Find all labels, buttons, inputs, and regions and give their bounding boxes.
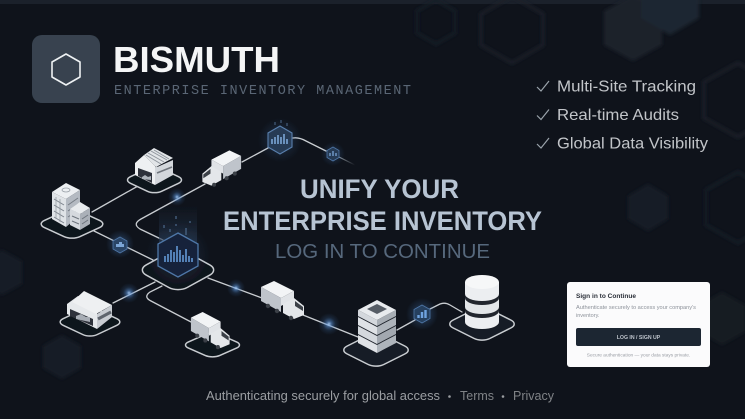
icon: cloud hexagon node bbox=[106, 230, 134, 258]
platform: warehouse top bbox=[123, 165, 186, 195]
footer bbox=[206, 389, 555, 403]
sign-in card bbox=[567, 282, 710, 367]
feature: multi-site tracking: Multi-Site Tracking bbox=[557, 78, 696, 96]
platform: lower truck bbox=[181, 331, 244, 359]
icon: truck top bbox=[202, 150, 241, 187]
footer bullet bbox=[502, 395, 504, 398]
platform: warehouse bottom bbox=[56, 306, 124, 338]
icon: small hexagon node top right bbox=[321, 142, 345, 166]
icon: warehouse top bbox=[135, 148, 173, 185]
icon: bar chart hexagon node bbox=[406, 298, 438, 330]
icon: office building bbox=[52, 183, 90, 230]
headline bbox=[223, 174, 542, 263]
card description: inventory. bbox=[576, 313, 600, 319]
icon: top analytics hexagon bbox=[258, 118, 302, 162]
platform: office bbox=[37, 208, 107, 240]
footer privacy link: Privacy bbox=[513, 389, 555, 403]
icon: central analytics hexagon bbox=[146, 205, 210, 287]
icon: glow node server line bbox=[318, 313, 340, 335]
top edge band bbox=[0, 0, 745, 4]
icon: truck right bbox=[261, 281, 304, 320]
icon: server rack bbox=[358, 300, 396, 353]
brand name: BISMUTH bbox=[113, 39, 280, 80]
card description: Authenticate securely to access your company's bbox=[576, 305, 696, 311]
feature: global data visibility: Global Data Visibility bbox=[557, 136, 708, 152]
card button bbox=[576, 328, 701, 346]
card title: Sign in to Continue bbox=[576, 293, 636, 300]
icon: warehouse bottom bbox=[67, 291, 112, 329]
icon: glow node lower-left line bbox=[119, 283, 139, 303]
card note: Secure authentication — your data stays private. bbox=[587, 352, 690, 358]
icon: glow node right line bbox=[227, 279, 245, 297]
feature list bbox=[537, 78, 708, 152]
platform: hub bbox=[137, 247, 219, 293]
icon: truck lower bbox=[191, 312, 230, 349]
platform: database bbox=[445, 306, 519, 342]
icon: glow node upper line bbox=[168, 188, 186, 206]
feature: real-time audits: Real-time Audits bbox=[557, 107, 679, 124]
logo tile bbox=[32, 35, 100, 103]
platform: server bbox=[339, 332, 413, 368]
supply network diagram bbox=[37, 118, 519, 368]
connector lines bbox=[92, 138, 462, 337]
card button: LOG IN / SIGN UP bbox=[617, 335, 661, 341]
sub-headline: LOG IN TO CONTINUE bbox=[275, 240, 490, 263]
headline line one: UNIFY YOUR bbox=[300, 174, 459, 204]
icon: database cylinder bbox=[465, 275, 499, 329]
brand tagline: ENTERPRISE INVENTORY MANAGEMENT bbox=[114, 84, 411, 99]
footer bullet bbox=[448, 395, 451, 398]
footer message: Authenticating securely for global access bbox=[206, 389, 440, 403]
headline line two: ENTERPRISE INVENTORY bbox=[223, 206, 542, 236]
icon: logo hexagon bbox=[52, 54, 80, 85]
footer terms link: Terms bbox=[460, 389, 494, 403]
